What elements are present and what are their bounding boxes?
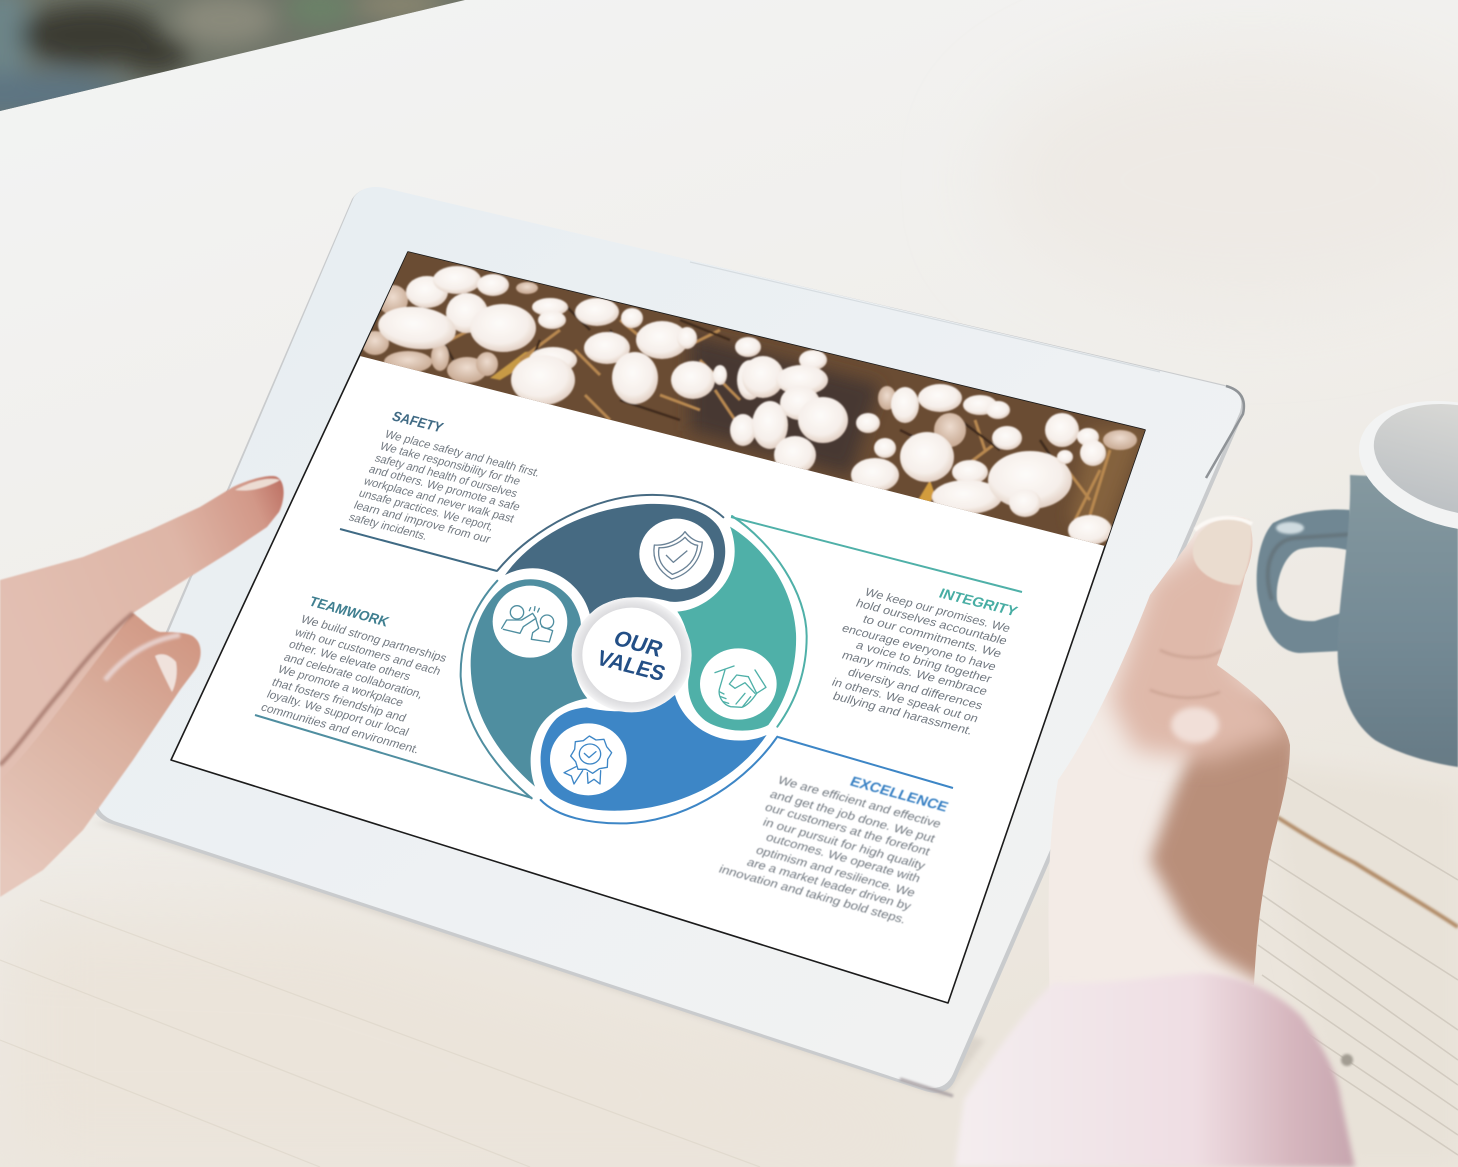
tablet shadow — [92, 820, 985, 1097]
center hub — [572, 598, 692, 712]
value block: safety: unsafe practices. We report, — [357, 488, 495, 533]
value block: safety: We take responsibility for the — [378, 441, 522, 488]
right hand holding tablet — [1049, 516, 1290, 984]
value block: integrity: encourage everyone to have — [840, 623, 998, 673]
value block: teamwork: and celebrate collaboration, — [282, 652, 425, 701]
icon: handshake — [700, 648, 777, 720]
connector lines — [255, 517, 1022, 798]
value block: excellence — [717, 773, 951, 926]
value block: teamwork — [259, 593, 449, 756]
value block: safety: We place safety and health first. — [383, 429, 542, 480]
value block: integrity: diversity and differences — [846, 667, 985, 712]
segment: excellence — [541, 695, 767, 811]
value block: safety — [347, 408, 542, 546]
icon: award rosette — [550, 723, 627, 795]
value block: integrity — [830, 585, 1021, 738]
value block: integrity: many minds. We embrace — [840, 650, 989, 698]
value block: safety: learn and improve from our — [352, 500, 492, 546]
icon: high five — [493, 586, 567, 658]
value block: safety: safety and health of ourselves — [373, 453, 519, 500]
value block: excellence: optimism and resilience. We — [754, 845, 917, 900]
values wheel diagram — [461, 495, 807, 823]
value block: integrity: bullying and harassment. — [831, 691, 974, 738]
icon: shield — [639, 519, 714, 589]
value block: integrity: INTEGRITY — [937, 585, 1021, 619]
tablet body — [93, 187, 1245, 1096]
value block: safety: workplace and never walk past — [361, 476, 517, 525]
right cluster — [856, 413, 880, 433]
value block: excellence: EXCELLENCE — [848, 773, 951, 814]
value block: integrity: a voice to bring together — [854, 640, 993, 686]
lower fingers — [0, 613, 201, 897]
tablet screen — [171, 245, 1150, 1003]
center hub: OUR — [610, 626, 667, 662]
pink sleeve — [955, 973, 1355, 1167]
value block: teamwork: loyalty. We support our local — [265, 689, 411, 739]
value block: integrity: to our commitments. We — [861, 614, 1003, 660]
left cluster — [361, 331, 389, 355]
value block: teamwork: communities and environment. — [259, 702, 421, 756]
value block: excellence: outcomes. We operate with — [764, 832, 922, 885]
value block: excellence: our customers at the forefont — [763, 802, 933, 858]
segment: safety — [505, 504, 725, 615]
outer arcs — [461, 495, 807, 823]
value block: excellence: We are efficient and effective — [776, 775, 943, 831]
center hub: VALES — [593, 645, 669, 686]
mug body — [1338, 475, 1458, 767]
value block: teamwork: other. We elevate others — [287, 639, 413, 683]
value block: teamwork: with our customers and each — [292, 627, 442, 678]
value block: safety: safety incidents. — [347, 512, 429, 543]
value block: excellence: are a market leader driven by — [745, 857, 913, 913]
value block: integrity: hold ourselves accountable — [854, 598, 1009, 648]
mug rim and interior — [1345, 381, 1458, 551]
value block: safety: SAFETY — [390, 408, 446, 435]
value block: teamwork: that fosters friendship and — [270, 677, 408, 725]
left hand pointing — [0, 476, 284, 897]
value block: excellence: in our pursuit for high quality — [761, 817, 927, 872]
segment: integrity — [677, 527, 796, 731]
value block: excellence: and get the job done. We put — [768, 789, 938, 845]
value block: integrity: in others. We speak out on — [830, 677, 980, 725]
value block: teamwork: TEAMWORK — [307, 593, 392, 630]
thumbnail — [1193, 518, 1251, 585]
mug handle — [1257, 510, 1362, 653]
value block: excellence: innovation and taking bold steps. — [717, 864, 908, 926]
segment: teamwork — [471, 579, 587, 787]
coffee mug — [1257, 381, 1458, 767]
value block: teamwork: We promote a workplace — [276, 664, 405, 709]
value block: integrity: We keep our promises. We — [863, 587, 1012, 635]
value block: safety: and others. We promote a safe — [367, 464, 522, 514]
middle cluster — [799, 350, 827, 370]
back of hand and index finger — [0, 476, 284, 790]
cotton photo banner — [350, 245, 1150, 555]
window backdrop top left — [0, 0, 465, 111]
value block: teamwork: We build strong partnerships — [299, 614, 449, 665]
